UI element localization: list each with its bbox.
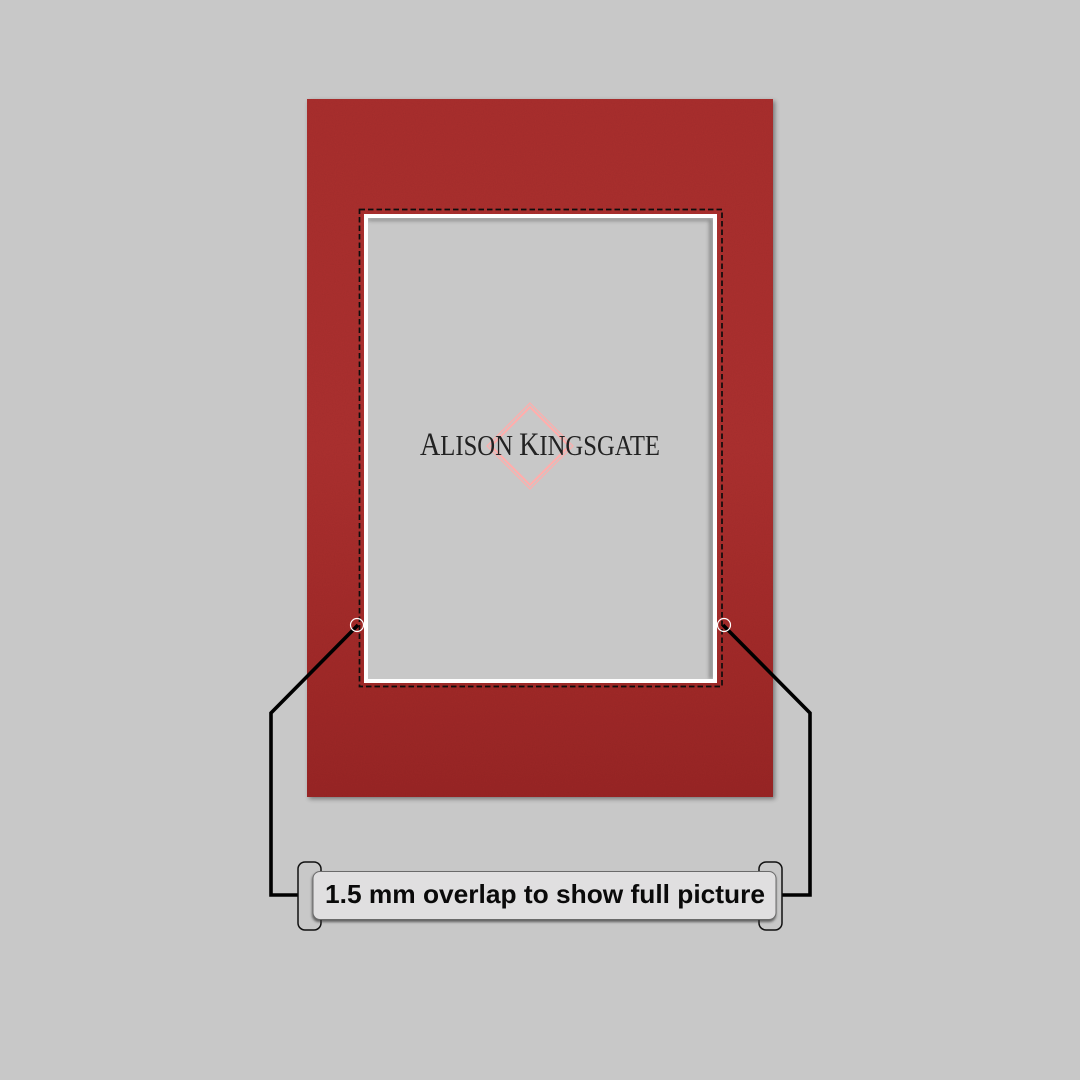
dashed overlap outline <box>360 210 722 686</box>
right bracket tab <box>759 862 782 930</box>
icon: pink diamond <box>487 403 573 489</box>
callout label <box>298 862 782 930</box>
logo: Alison Kingsgate <box>420 403 660 489</box>
logo wordmark: ALISON KINGSGATE <box>420 427 660 463</box>
left leader arrow <box>271 618 364 895</box>
right marker circle <box>718 618 730 632</box>
panel: white-edged window opening <box>364 214 717 683</box>
panel: red mount board <box>307 99 775 799</box>
callout text: 1.5 mm overlap to show full picture <box>325 879 765 909</box>
left marker circle <box>350 618 364 632</box>
right leader arrow <box>718 618 810 895</box>
left bracket tab <box>298 862 321 930</box>
